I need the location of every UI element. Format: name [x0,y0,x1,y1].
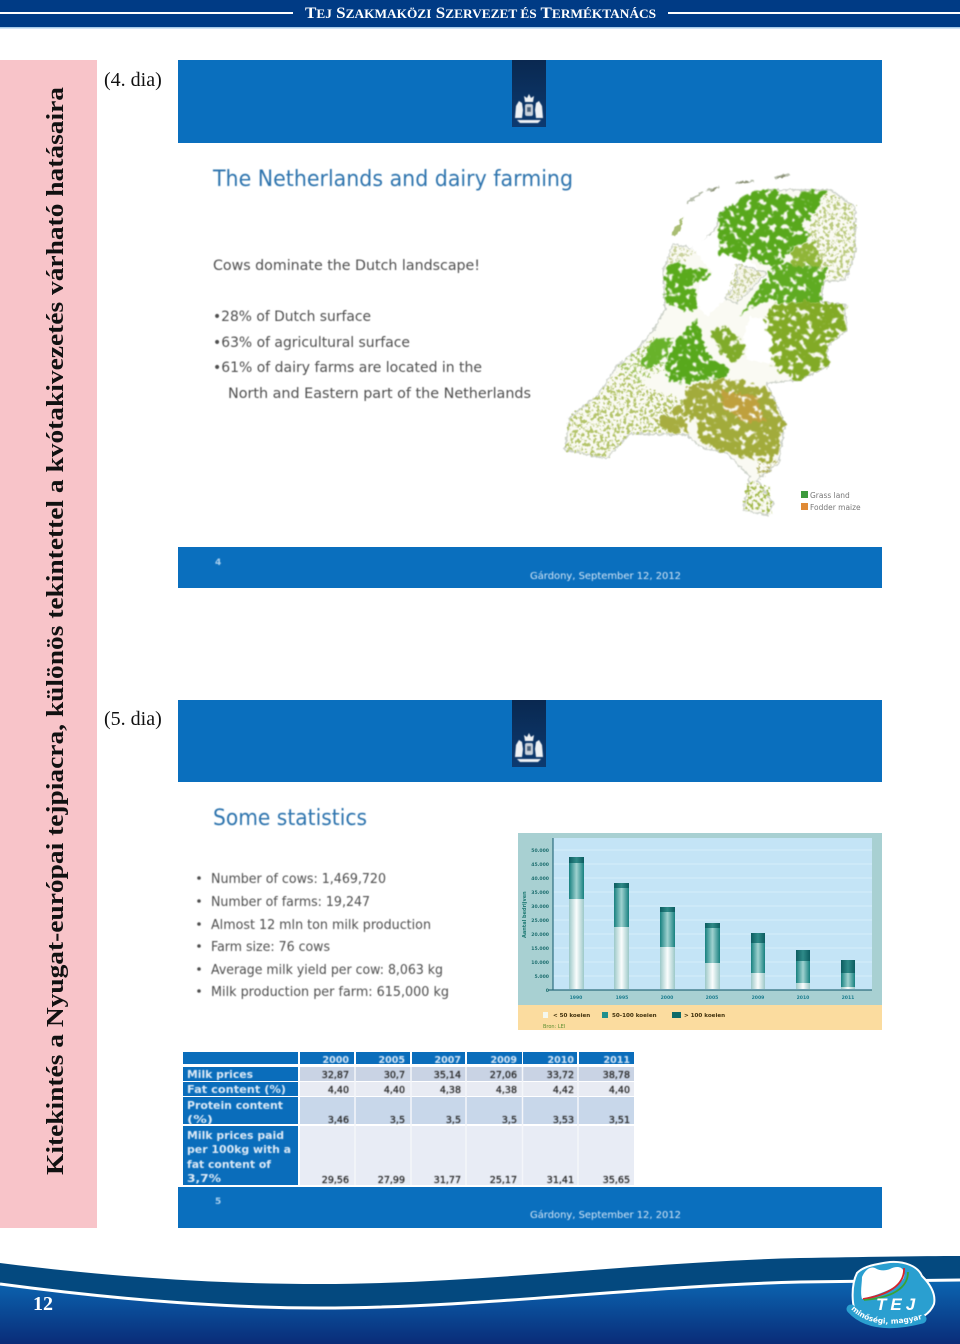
chart y axis labels: 30.000 [531,904,549,910]
map base outline [565,190,855,515]
panel: slide 5 [178,700,882,1228]
table values: 4,40 [609,1085,630,1096]
chart y axis title: Aantal bedrijven [522,891,528,938]
chart legend: Bron: LEI [543,1024,565,1030]
table header row: 2009 [491,1055,517,1066]
table row labels: Protein content [187,1099,283,1112]
logo wordmark: TEJ [876,1295,919,1314]
table values: 27,06 [490,1070,517,1081]
logo: TEJ minőségi, magyar [846,1260,936,1328]
milk price table [183,1052,634,1186]
slide 4 text block: North and Eastern part of the Netherlands [228,386,531,402]
slide 5 title: Some statistics [213,806,367,831]
table header row: 2011 [604,1055,630,1066]
slide 5 footer bar [178,1187,882,1228]
caption: slide 5: (5. dia) [104,708,162,730]
slide 4 footer bar: 4 [215,558,221,568]
table row labels: Milk prices paid [187,1129,284,1142]
slide 4 top banner [178,60,882,143]
map: pale farmland speckle [565,193,855,513]
logo tagline band [851,1309,922,1324]
table values: 27,99 [378,1175,405,1186]
statistics list: Almost 12 mln ton milk production [211,917,431,933]
table values: 25,17 [490,1175,517,1186]
statistics list: Farm size: 76 cows [211,939,330,955]
table values: 29,56 [322,1175,349,1186]
slide 5 crest tab [512,700,546,767]
panel: slide 4 [178,60,882,588]
table row labels: (%) [187,1113,213,1126]
slide 4 title: The Netherlands and dairy farming [212,167,573,192]
slide 4 text block: •28% of Dutch surface [213,309,371,325]
table values: 32,87 [322,1070,349,1081]
bars [569,857,855,989]
slide 4 text block [213,258,531,402]
slide 4 footer bar [178,547,882,588]
statistics list: Milk production per farm: 615,000 kg [211,984,449,1000]
table header row: 2007 [435,1055,461,1066]
table values: 3,46 [328,1115,349,1126]
table values [322,1070,630,1186]
table values: 4,38 [440,1085,461,1096]
chart legend: 50-100 koeien [612,1013,657,1019]
logo tricolour swoosh [863,1268,904,1299]
table header row: 2010 [548,1055,574,1066]
map legend: Grass land [810,491,850,500]
chart x axis labels: 1995 [616,995,628,1001]
slide 4 text block: •63% of agricultural surface [213,335,410,351]
table values: 4,42 [553,1085,574,1096]
table row labels: Fat content (%) [187,1083,286,1096]
chart x axis labels: 1990 [570,995,582,1001]
map: Wadden islands [672,174,790,237]
map: grass land areas [640,190,827,382]
map legend: Fodder maize [810,503,861,512]
chart y axis labels: 45.000 [531,862,549,868]
chart y axis labels: 50.000 [531,848,549,854]
chart axis [548,838,872,990]
table header row [183,1052,634,1066]
chart y axis labels: 25.000 [531,918,549,924]
table values: 4,38 [496,1085,517,1096]
stacked bar chart: farms by herd size [518,833,882,1030]
chart x axis labels: 2010 [797,995,809,1001]
table values: 30,7 [384,1070,405,1081]
chart legend: < 50 koeien [553,1013,590,1019]
table values: 3,5 [502,1115,517,1126]
map legend [801,491,861,512]
map: mixed land areas [710,240,845,380]
slide 5 footer bar: 5 [215,1197,221,1207]
slide 5 top banner [178,700,882,782]
chart x axis labels: 2005 [706,995,718,1001]
table body cells [300,1067,634,1185]
statistics list: Number of cows: 1,469,720 [211,871,386,887]
table row labels: fat content of [187,1158,271,1171]
table values: 31,77 [434,1175,461,1186]
rotated article title: Kitekintés a Nyugat-európai tejpiacra, különös tekintettel a kvótakivezetés várható hatásaira [43,87,69,1175]
header title: TEJ SZAKMAKÖZI SZERVEZET ÉS TERMÉKTANÁCS [305,5,656,22]
statistics list: Number of farms: 19,247 [211,894,370,910]
chart x axis labels: 2009 [752,995,764,1001]
chart x axis labels: 2000 [661,995,673,1001]
slide 4 text block: •61% of dairy farms are located in the [213,360,482,376]
caption: slide 4: (4. dia) [104,69,162,91]
table header row: 2005 [379,1055,405,1066]
table values: 35,14 [434,1070,461,1081]
slide 4 text block: Cows dominate the Dutch landscape! [213,258,480,274]
table values: 38,78 [603,1070,630,1081]
table values: 3,5 [390,1115,405,1126]
table values: 3,53 [553,1115,574,1126]
slide 4 footer bar: Gárdony, September 12, 2012 [530,571,681,582]
page number: 12 [33,1293,53,1315]
chart y axis labels: 0 [546,988,549,994]
chart y axis labels [531,848,549,994]
table values: 33,72 [547,1070,574,1081]
chart y axis labels: 5.000 [534,974,549,980]
slide 4 crest tab [512,60,546,127]
table values: 4,40 [328,1085,349,1096]
page header band [0,0,960,28]
panel: pink side title strip [0,60,97,1228]
table values: 4,40 [384,1085,405,1096]
statistics list: Average milk yield per cow: 8,063 kg [211,962,443,978]
table values: 3,51 [609,1115,630,1126]
chart y axis labels: 20.000 [531,932,549,938]
chart legend [543,1012,725,1030]
chart y axis labels: 40.000 [531,876,549,882]
chart y axis labels: 10.000 [531,960,549,966]
table row labels [183,1067,298,1185]
chart legend: > 100 koeien [684,1013,725,1019]
table values: 3,5 [446,1115,461,1126]
chart x axis labels: 2011 [842,995,854,1001]
logo tagline: minőségi, magyar [851,1306,922,1325]
table header row: 2000 [323,1055,349,1066]
logo white heart [861,1267,904,1299]
map: fodder maize areas [653,378,785,463]
table row labels: per 100kg with a [187,1143,291,1156]
chart x axis labels [570,995,854,1001]
table row labels: 3,7% [187,1172,221,1185]
chart y axis labels: 15.000 [531,946,549,952]
map water: IJsselmeer and Veluwe gaps [690,230,773,363]
map of the Netherlands [565,174,861,515]
table row labels: Milk prices [187,1068,253,1081]
chart y axis labels: 35.000 [531,890,549,896]
slide 5 footer bar: Gárdony, September 12, 2012 [530,1210,681,1221]
page footer wave [0,1256,960,1344]
statistics list [197,871,449,1000]
table values: 31,41 [547,1175,574,1186]
table values: 35,65 [603,1175,630,1186]
